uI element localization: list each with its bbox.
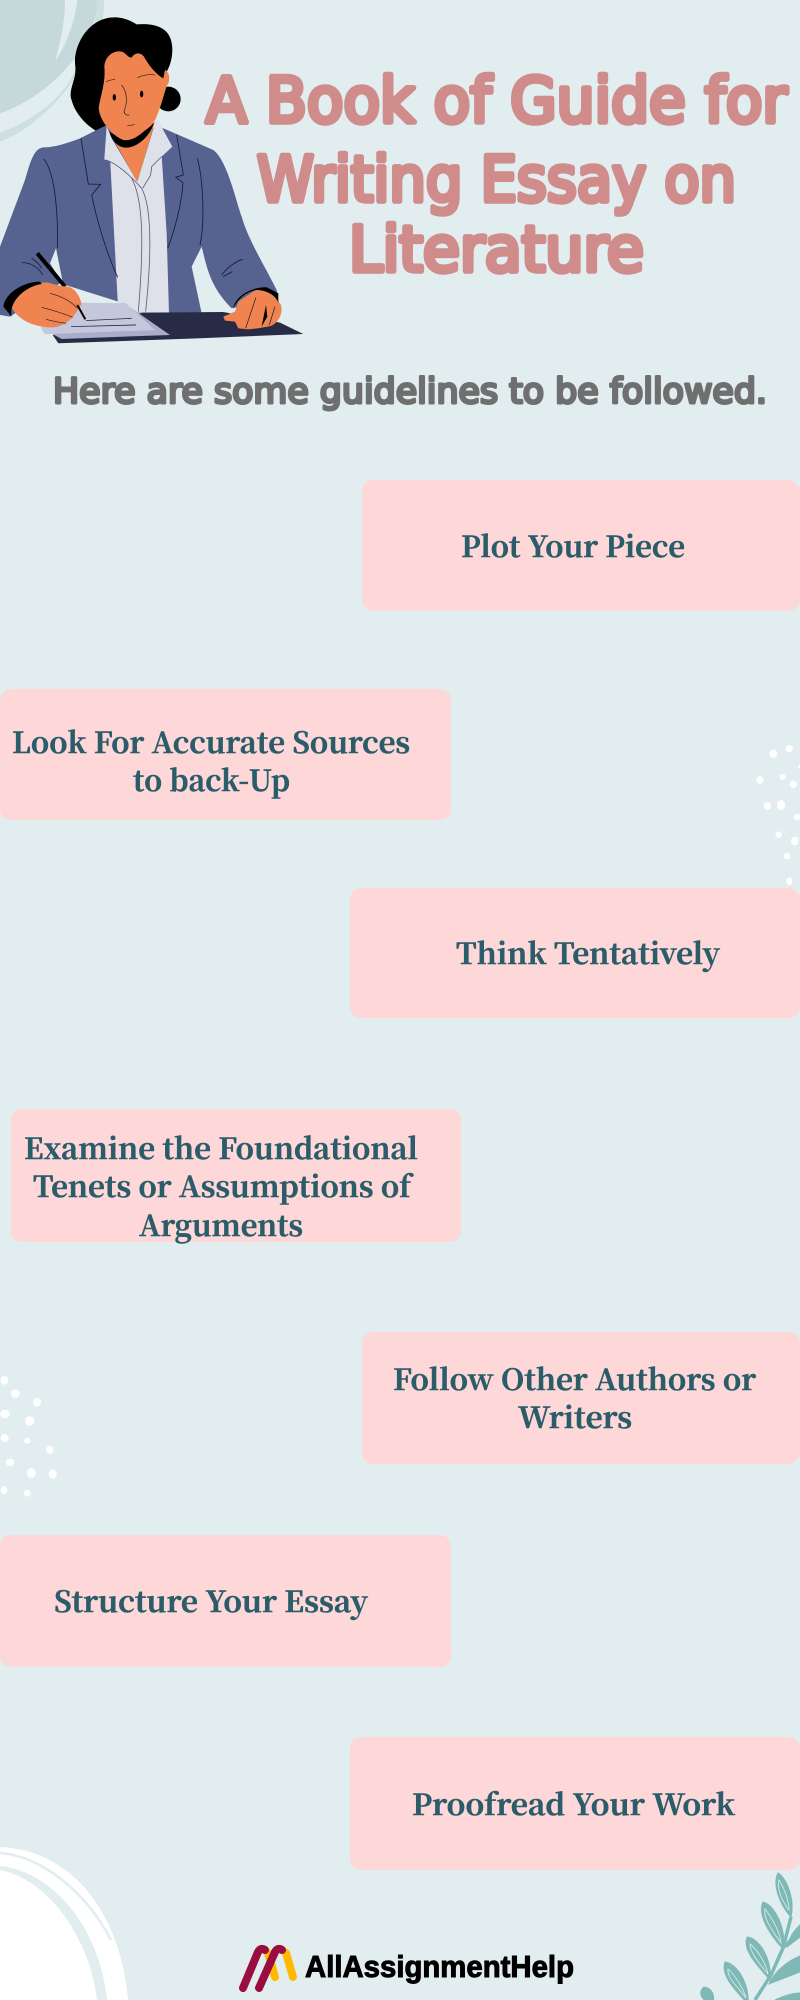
illustration: woman writing at desk: [0, 17, 303, 343]
card 7: Proofread Your Work: Proofread Your Work: [412, 1783, 735, 1824]
papers: [41, 303, 170, 339]
card 2: Look For Accurate Sources: to back-Up: [133, 759, 290, 800]
card 1: Plot Your Piece: [362, 480, 800, 611]
facial features: [106, 75, 155, 126]
title: Literature: [349, 213, 644, 286]
dots: left side: [0, 1376, 57, 1497]
dots: right side: [756, 745, 800, 885]
hair: [71, 17, 181, 135]
suit and shirt lines: [22, 135, 243, 312]
pen tip: [77, 305, 85, 319]
right hand: [223, 287, 282, 329]
card 1: Plot Your Piece: Plot Your Piece: [461, 525, 685, 566]
card 4: Examine the Foundational Tenets: Arguments: [139, 1204, 303, 1245]
card 2: Look For Accurate Sources: [0, 689, 451, 820]
card 6: Structure Your Essay: Structure Your Essay: [54, 1580, 368, 1621]
decorative circle: bottom left: [0, 1847, 128, 2000]
logo: AllAssignmentHelp: [243, 1949, 574, 1988]
plant: bottom right: [701, 1873, 800, 2000]
title: [206, 64, 787, 286]
card 3: Think Tentatively: Think Tentatively: [456, 932, 720, 973]
title: A Book of Guide for: [206, 64, 787, 137]
decorative circle: top left: [0, 0, 104, 142]
left hand: [3, 282, 82, 327]
shirt: [104, 117, 172, 313]
collar shadow: [109, 123, 154, 148]
title: Writing Essay on: [257, 143, 736, 216]
card 5: Follow Other Authors or Writers: Follow Other Authors or: [393, 1358, 756, 1399]
card 3: Think Tentatively: [350, 888, 800, 1018]
desk folder: [53, 312, 303, 343]
card 7: Proofread Your Work: [350, 1737, 800, 1870]
suit jacket: [0, 125, 278, 317]
card 4: Examine the Foundational Tenets: Tenets or Assumptions of: [33, 1165, 414, 1206]
subtitle: Here are some guidelines to be followed.: [53, 372, 767, 412]
card 4: Examine the Foundational Tenets: Examine the Foundational: [24, 1127, 418, 1168]
card 6: Structure Your Essay: [0, 1535, 451, 1667]
card 2: Look For Accurate Sources: Look For Accurate Sources: [12, 721, 410, 762]
gap between arm and body: [50, 248, 63, 285]
logo wordmark: AllAssignmentHelp: [305, 1949, 574, 1984]
face: [99, 51, 169, 140]
neck: [112, 122, 155, 182]
logo mark: [243, 1949, 293, 1988]
card 4: Examine the Foundational Tenets: [11, 1109, 461, 1245]
card 5: Follow Other Authors or Writers: [362, 1332, 800, 1464]
pen upper: [37, 253, 65, 287]
card 5: Follow Other Authors or Writers: Writers: [518, 1396, 632, 1437]
